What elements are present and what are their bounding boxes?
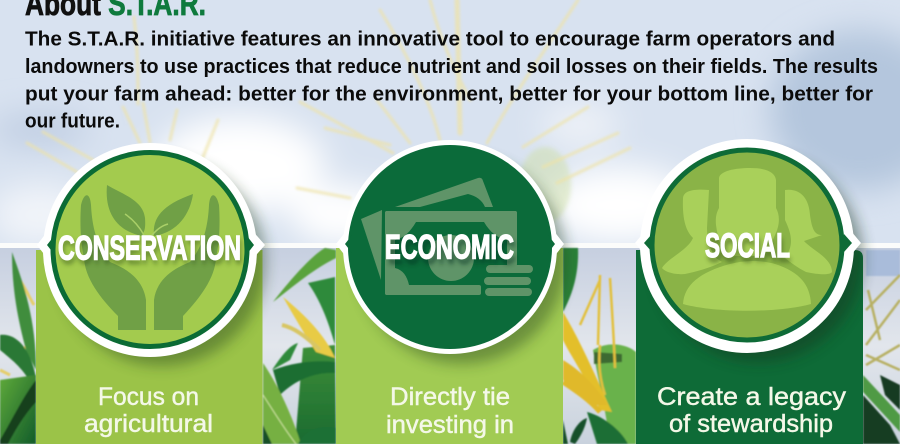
corn plants centre right bbox=[563, 248, 636, 444]
badge: conservation: CONSERVATION bbox=[60, 233, 242, 272]
background: white horizon band bbox=[0, 243, 900, 249]
corn plants left bbox=[0, 252, 36, 444]
intro text block: The S.T.A.R. initiative features an innovative tool to encourage farm operators and bbox=[25, 28, 835, 50]
icon: group of three people bbox=[662, 168, 832, 311]
text: conservation description: agricultural bbox=[84, 410, 213, 438]
text: social description: of stewardship bbox=[669, 410, 833, 438]
intro text block: our future. bbox=[25, 110, 120, 132]
text: economic description: investing in bbox=[386, 411, 514, 439]
text: economic description: Directly tie bbox=[390, 383, 510, 411]
icon: banknotes and coins bbox=[361, 178, 533, 296]
panel: economic column bbox=[336, 248, 563, 444]
text: social description: Create a legacy bbox=[657, 383, 847, 411]
badge: social: SOCIAL bbox=[707, 232, 791, 270]
heading: social: SOCIAL bbox=[705, 227, 790, 265]
background: corn field photo bbox=[0, 248, 900, 444]
badge: conservation bbox=[37, 143, 266, 366]
intro text block: put your farm ahead: better for the environment, better for your bottom line, better for bbox=[25, 84, 873, 106]
badge: economic: ECONOMIC bbox=[388, 233, 516, 272]
icon: hands holding a seedling bbox=[80, 185, 220, 330]
text: conservation description bbox=[84, 383, 213, 438]
panel: social column bbox=[636, 250, 863, 444]
heading: conservation: CONSERVATION bbox=[58, 230, 241, 268]
heading: economic: ECONOMIC bbox=[385, 228, 514, 266]
badge: economic bbox=[336, 140, 566, 364]
panel: conservation column bbox=[36, 250, 262, 444]
corn plants right bbox=[863, 275, 900, 444]
text: conservation description: Focus on bbox=[98, 383, 199, 411]
intro text block bbox=[25, 28, 878, 132]
text: social description bbox=[657, 383, 847, 438]
text: economic description bbox=[386, 383, 514, 439]
intro text block: landowners to use practices that reduce nutrient and soil losses on their fields. The results bbox=[25, 56, 878, 78]
badge: social bbox=[635, 139, 863, 362]
corn plants centre left bbox=[263, 248, 336, 444]
background: sky and corn tassels bbox=[0, 0, 900, 246]
